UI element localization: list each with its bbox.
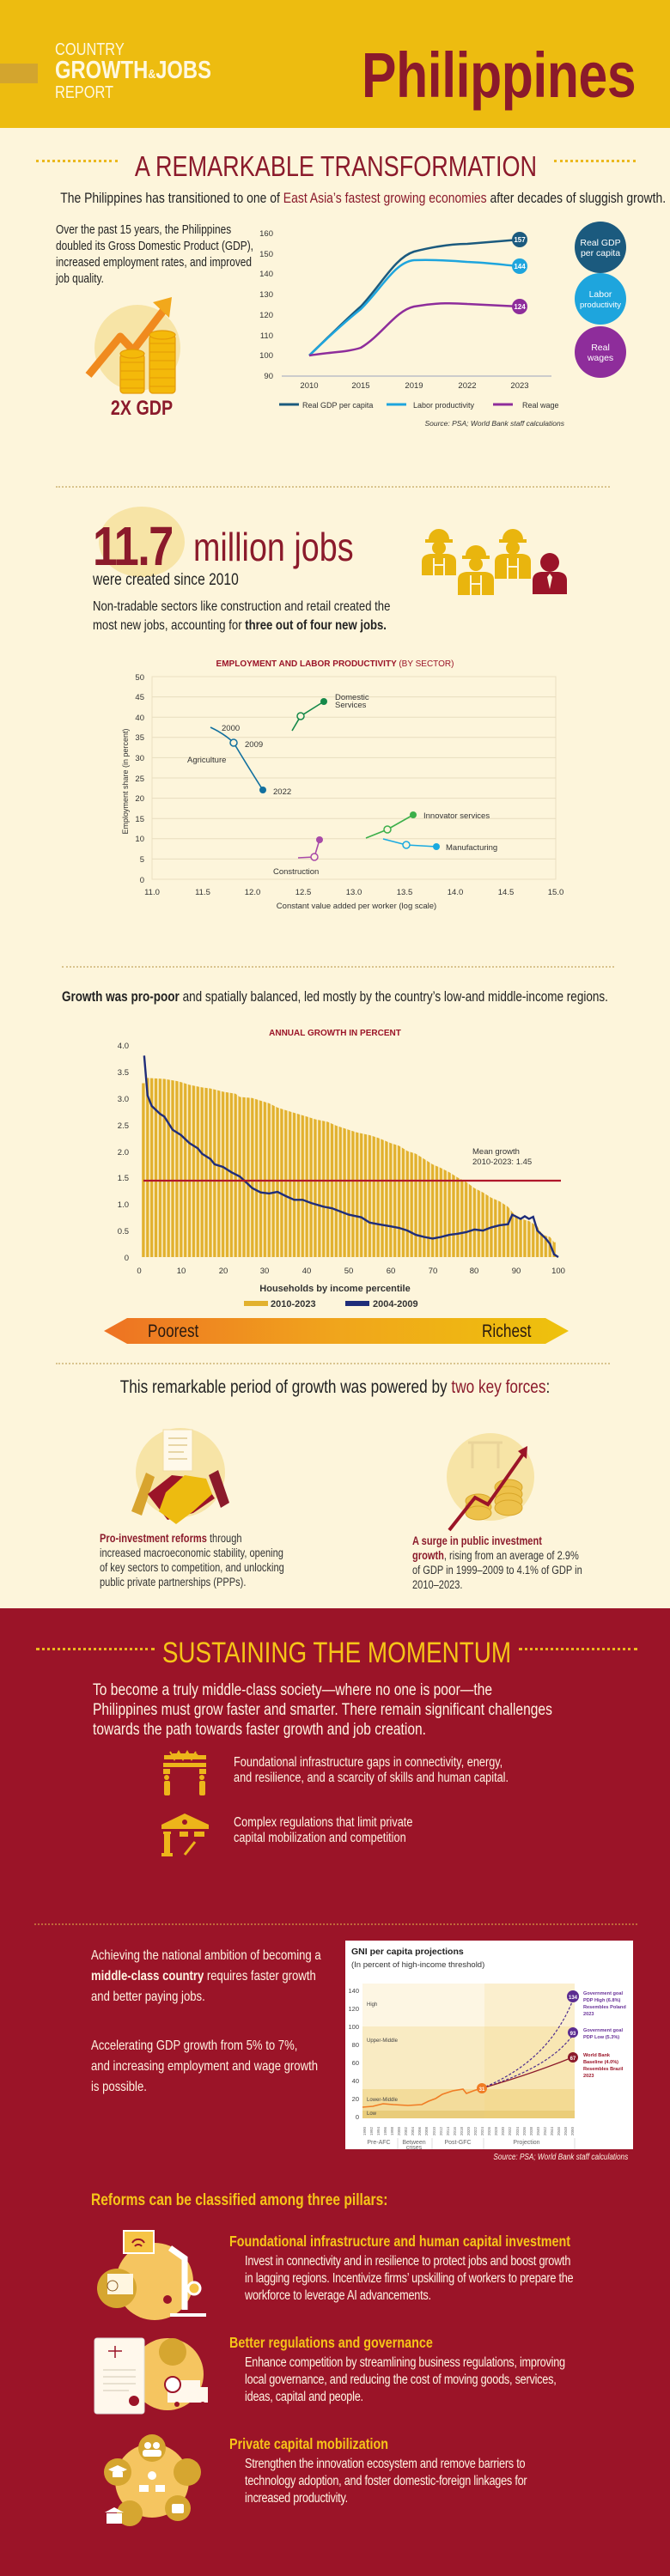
text: public investment surge: growth, rising from an average of 2.9% [412, 1549, 579, 1562]
line chart: GDP, productivity, wages: 140 [259, 270, 273, 279]
icon: workers [422, 529, 567, 595]
legend circles: productivity [580, 301, 621, 310]
line chart: GDP, productivity, wages: 120 [259, 311, 273, 320]
bar chart: annual growth by percentile: 80 [470, 1267, 478, 1276]
bar chart: annual growth by percentile: 40 [302, 1267, 311, 1276]
text: pro-poor growth: Growth was pro-poor and spatially balanced, led mostly by the country’s low-and middle-income regions. [62, 989, 608, 1005]
chart: GNI per capita projections: Government goal [583, 2028, 623, 2033]
bar chart: annual growth by percentile: 0.5 [118, 1227, 129, 1236]
intro paragraph: towards the path towards faster growth and job creation. [93, 1721, 426, 1739]
pillar 1: workforce to leverage AI advancements. [245, 2288, 431, 2303]
chart: GNI per capita projections: 2040 [536, 2126, 540, 2136]
text: pro-investment reforms: public private partnerships (PPPs). [100, 1576, 246, 1589]
chart: GNI per capita projections: PDP Low (5.3%) [583, 2035, 619, 2040]
chart: GNI per capita projections: crises [406, 2145, 423, 2151]
pillar 3 [229, 2435, 527, 2506]
scatter chart: employment and labor productivity: Domestic [335, 693, 369, 702]
scatter chart: employment and labor productivity: 20 [135, 794, 144, 804]
chart: GNI per capita projections: 2020 [466, 2126, 471, 2136]
bar chart: annual growth by percentile: 3.0 [118, 1095, 129, 1104]
line chart: GDP, productivity, wages: 110 [260, 331, 273, 341]
scatter chart: employment and labor productivity: Employment share (in percent) [121, 728, 130, 835]
legend circles: Real [591, 343, 610, 353]
chart: GNI per capita projections: 2004 [411, 2126, 415, 2136]
chart: GNI per capita projections: Low [367, 2111, 377, 2117]
chart: GNI per capita projections: Resembles Poland [583, 2005, 626, 2010]
bar chart: annual growth by percentile: Households by income percentile [259, 1284, 411, 1294]
line chart: GDP, productivity, wages: 2010 [300, 381, 319, 391]
chart: GNI per capita projections: 2028 [494, 2126, 498, 2136]
chart: GNI per capita projections [345, 1941, 633, 2151]
pillar 1 [229, 2233, 573, 2303]
text: pro-investment reforms: Pro-investment reforms through [100, 1532, 242, 1545]
chart: GNI per capita projections: Pre-AFC [367, 2140, 391, 2146]
subtitle: The Philippines has transitioned to one of East Asia’s fastest growing economies after decades of sluggish growth. [60, 190, 666, 206]
line chart: GDP, productivity, wages: 2023 [510, 381, 529, 391]
chart: GNI per capita projections: 2038 [529, 2126, 533, 2136]
report label: REPORT [55, 83, 113, 102]
intro paragraph: Philippines must grow faster and smarter. There remain significant challenges [93, 1701, 552, 1719]
pillar 3: increased productivity. [245, 2491, 348, 2506]
text: GDP doubled: doubled its Gross Domestic Product (GDP), [56, 240, 253, 253]
chart: GNI per capita projections: Baseline (4.0%) [583, 2060, 618, 2065]
pillar 2: Better regulations and governance [229, 2334, 433, 2351]
scatter chart: employment and labor productivity: 50 [135, 673, 144, 683]
text: accelerating growth [91, 2038, 318, 2094]
report label: COUNTRY [55, 40, 125, 59]
bar chart: annual growth by percentile: 100 [551, 1267, 565, 1276]
line chart: GDP, productivity, wages: 124 [514, 303, 526, 311]
section title: sustaining [36, 1637, 637, 1669]
bar chart: annual growth by percentile: 2.5 [118, 1121, 129, 1131]
chart: GNI per capita projections: 140 [348, 1987, 359, 1995]
line chart: GDP, productivity, wages [259, 229, 565, 428]
chart: GNI per capita projections: 2048 [563, 2126, 568, 2136]
text: middle-class ambition [91, 1948, 321, 2004]
bar chart: annual growth by percentile: Mean growth [472, 1147, 520, 1157]
chart: GNI per capita projections: 60 [352, 2059, 359, 2067]
chart: GNI per capita projections: 1998 [390, 2126, 394, 2136]
chart: GNI per capita projections: 1994 [376, 2126, 381, 2136]
scatter chart: employment and labor productivity: Agriculture [187, 756, 226, 765]
text: GDP doubled: Over the past 15 years, the Philippines [56, 223, 231, 237]
chart: GNI per capita projections: 2044 [550, 2126, 554, 2136]
text: accelerating growth: Accelerating GDP growth from 5% to 7%, [91, 2038, 297, 2053]
pillar 3: Private capital mobilization [229, 2435, 388, 2452]
bar chart: annual growth by percentile: 30 [260, 1267, 269, 1276]
chart: GNI per capita projections: 2046 [557, 2126, 561, 2136]
report label: GROWTH&JOBS [55, 57, 211, 84]
big number: jobs: were created since 2010 [93, 571, 239, 589]
chart: GNI per capita projections: High [367, 2002, 377, 2008]
line chart: GDP, productivity, wages: 130 [259, 290, 273, 300]
2X GDP label: 2X GDP [111, 397, 173, 420]
scatter chart: employment and labor productivity [121, 659, 563, 911]
chart: GNI per capita projections: 0 [356, 2113, 359, 2121]
section title: transformation [36, 150, 636, 182]
chart: GNI per capita projections: 2002 [404, 2126, 408, 2136]
chart: GNI per capita projections: 2018 [460, 2126, 464, 2136]
chart: GNI per capita projections: 2010 [432, 2126, 436, 2136]
text: non-tradable sectors [93, 599, 390, 633]
text: accelerating growth: and increasing employment and wage growth [91, 2059, 318, 2074]
chart: GNI per capita projections: Between [402, 2140, 426, 2146]
pillar 1: Invest in connectivity and in resilience to protect jobs and boost growth [245, 2254, 570, 2269]
icon: bank with broken chain [161, 1814, 209, 1856]
legend circles: wages [587, 353, 613, 363]
challenge: regulations: Complex regulations that limit private [234, 1815, 412, 1830]
chart: GNI per capita projections: 2023 [583, 2074, 594, 2079]
chart: GNI per capita projections: 2016 [453, 2126, 457, 2136]
legend circles: per capita [581, 248, 620, 258]
pillar 2: Enhance competition by streamlining business regulations, improving [245, 2355, 565, 2370]
text: pro-investment reforms: of key sectors to competition, and unlocking [100, 1561, 284, 1574]
scatter chart: employment and labor productivity: Services [335, 701, 367, 710]
text: GDP doubled: increased employment rates, and improved [56, 256, 252, 270]
separator [56, 486, 610, 488]
bar chart: annual growth by percentile: 4.0 [118, 1042, 129, 1051]
pillar 1: Foundational infrastructure and human capital investment [229, 2233, 570, 2250]
source note: Source: PSA; World Bank staff calculations [493, 2153, 628, 2162]
legend circles: Labor [589, 289, 612, 300]
chart: GNI per capita projections: 2000 [397, 2126, 401, 2136]
chart: GNI per capita projections: 2022 [473, 2126, 478, 2136]
scatter chart: employment and labor productivity: 11.0 [144, 888, 160, 897]
chart: GNI per capita projections: 1990 [362, 2126, 367, 2136]
challenge: infrastructure [234, 1755, 509, 1785]
scatter chart: employment and labor productivity: 0 [140, 876, 144, 885]
icon: public investment coins [447, 1433, 534, 1530]
chart: GNI per capita projections: 31 [479, 2087, 485, 2093]
text: GDP doubled [55, 223, 253, 286]
scatter chart: employment and labor productivity: 14.0 [448, 888, 463, 897]
text: GDP doubled: job quality. [56, 272, 104, 286]
bar chart: annual growth by percentile: 0 [137, 1267, 142, 1276]
chart: GNI per capita projections: Projection [513, 2140, 540, 2146]
chart: GNI per capita projections: (In percent of high-income threshold) [351, 1960, 484, 1970]
line chart: GDP, productivity, wages: 100 [259, 351, 273, 361]
scatter chart: employment and labor productivity: 2000 [222, 724, 240, 733]
scatter chart: employment and labor productivity: 2009 [245, 740, 263, 750]
bar chart: annual growth by percentile: 0 [125, 1254, 129, 1263]
chart: GNI per capita projections: 20 [352, 2095, 359, 2103]
line chart: GDP, productivity, wages: Labor productivity [413, 401, 475, 410]
scatter chart: employment and labor productivity: Constant value added per worker (log scale) [277, 902, 436, 911]
bar chart: annual growth by percentile: 3.5 [118, 1068, 129, 1078]
chart: GNI per capita projections: 67 [570, 2057, 576, 2062]
panel: sustaining the momentum (red) [0, 1608, 670, 2576]
line chart: GDP, productivity, wages: 160 [259, 229, 273, 239]
line chart: GDP, productivity, wages: 144 [514, 263, 526, 270]
poorest-richest arrow [104, 1318, 569, 1344]
bar chart: annual growth by percentile: 1.0 [118, 1200, 129, 1210]
chart: GNI per capita projections: 100 [348, 2023, 359, 2031]
icon: regulations and governance [94, 2338, 208, 2414]
header tab [0, 64, 38, 83]
bar chart: annual growth by percentile: 2004-2009 [373, 1299, 418, 1309]
scatter chart: employment and labor productivity: 13.5 [397, 888, 412, 897]
challenge: infrastructure: and resilience, and a scarcity of skills and human capital. [234, 1771, 509, 1785]
separator [34, 1923, 637, 1925]
section title: transformation: A REMARKABLE TRANSFORMATION [135, 150, 537, 182]
big number: jobs: million jobs [193, 525, 354, 569]
line chart: GDP, productivity, wages: 150 [259, 250, 273, 259]
text: public investment surge: of GDP in 1999–2009 to 4.1% of GDP in [412, 1564, 582, 1577]
chart: GNI per capita projections: 2034 [515, 2126, 520, 2136]
big number: jobs: 11.7 [93, 515, 173, 577]
intro paragraph: To become a truly middle-class society—where no one is poor—the [93, 1681, 492, 1699]
icon: infrastructure and human capital [97, 2231, 206, 2320]
bar chart: annual growth by percentile: 2010-2023 [271, 1299, 316, 1309]
line chart: GDP, productivity, wages: 2015 [351, 381, 370, 391]
intro paragraph [93, 1681, 552, 1739]
icon: private capital network [104, 2434, 201, 2526]
scatter chart: employment and labor productivity: 40 [135, 714, 144, 723]
chart: GNI per capita projections: 2023 [583, 2012, 594, 2017]
scatter chart: employment and labor productivity: 45 [135, 693, 144, 702]
scatter chart: employment and labor productivity: 25 [135, 775, 144, 784]
line chart: GDP, productivity, wages: 2019 [405, 381, 423, 391]
scatter chart: employment and labor productivity: 15 [135, 815, 144, 824]
chart: GNI per capita projections: 2050 [570, 2126, 575, 2136]
chart: GNI per capita projections: 2030 [501, 2126, 505, 2136]
scatter chart: employment and labor productivity: 11.5 [195, 888, 210, 897]
separator [56, 1363, 610, 1364]
bar chart: annual growth by percentile: 2010-2023: 1.45 [472, 1157, 532, 1167]
chart: GNI per capita projections: 2012 [439, 2126, 443, 2136]
pillar 3: technology adoption, and foster domestic-foreign linkages for [245, 2474, 527, 2488]
pillar 2 [229, 2334, 565, 2404]
scatter chart: employment and labor productivity: Innovator services [423, 811, 490, 821]
chart: GNI per capita projections: World Bank [583, 2053, 611, 2058]
chart: GNI per capita projections: Upper-Middle [367, 2038, 399, 2044]
chart: GNI per capita projections: 80 [352, 2041, 359, 2049]
chart: GNI per capita projections: GNI per capita projections [351, 1947, 464, 1957]
text: non-tradable sectors: most new jobs, accounting for three out of four new jobs. [93, 618, 387, 633]
chart: GNI per capita projections: 40 [352, 2077, 359, 2085]
scatter chart: employment and labor productivity: 12.5 [295, 888, 311, 897]
bar chart: annual growth by percentile: 2.0 [118, 1148, 129, 1157]
chart: GNI per capita projections: 2024 [480, 2126, 484, 2136]
chart: GNI per capita projections: 2026 [487, 2126, 491, 2136]
bar chart: annual growth by percentile: 50 [344, 1267, 353, 1276]
challenge: infrastructure: Foundational infrastructure gaps in connectivity, energy, [234, 1755, 502, 1770]
chart: GNI per capita projections: Government goal [583, 1991, 623, 1996]
scatter chart: employment and labor productivity: 15.0 [548, 888, 563, 897]
scatter chart: employment and labor productivity: Manufacturing [446, 843, 497, 853]
chart: GNI per capita projections: 2014 [446, 2126, 450, 2136]
text: middle-class ambition: middle-class country requires faster growth [91, 1969, 316, 1984]
line chart: GDP, productivity, wages: Real GDP per capita [302, 401, 373, 410]
scatter chart: employment and labor productivity: 30 [135, 754, 144, 763]
scatter chart: employment and labor productivity: 14.5 [498, 888, 514, 897]
text: non-tradable sectors: Non-tradable sectors like construction and retail created the [93, 599, 390, 614]
text: public investment surge: A surge in public investment [412, 1534, 542, 1547]
chart: GNI per capita projections: 134 [569, 1996, 578, 2001]
text: pro-investment reforms: increased macroeconomic stability, opening [100, 1546, 283, 1559]
report label [55, 40, 211, 102]
challenge: regulations [234, 1815, 412, 1845]
scatter chart: employment and labor productivity: 13.0 [346, 888, 362, 897]
bar chart: annual growth by percentile: 90 [512, 1267, 521, 1276]
heading: two key forces: This remarkable period of growth was powered by two key forces: [120, 1377, 550, 1397]
chart: GNI per capita projections: 2006 [417, 2126, 422, 2136]
scatter chart: employment and labor productivity: 35 [135, 733, 144, 743]
chart: GNI per capita projections: 2042 [543, 2126, 547, 2136]
bar chart: annual growth by percentile: 10 [177, 1267, 186, 1276]
chart: GNI per capita projections: Resembles Brazil [583, 2067, 624, 2072]
line chart: GDP, productivity, wages: Real wage [522, 401, 559, 410]
line chart: GDP, productivity, wages: Source: PSA; World Bank staff calculations [424, 419, 565, 428]
chart: GNI per capita projections: Lower-Middle [367, 2098, 399, 2103]
icon: bridge with people [163, 1752, 206, 1795]
icon: coins with arrow [88, 297, 180, 393]
scatter chart: employment and labor productivity: 10 [135, 835, 144, 844]
line chart: GDP, productivity, wages: 90 [264, 372, 273, 381]
scatter chart: employment and labor productivity: Construction [273, 867, 319, 877]
bar chart: annual growth by percentile: 70 [429, 1267, 437, 1276]
chart: GNI per capita projections: 1996 [383, 2126, 387, 2136]
line chart: GDP, productivity, wages: 157 [514, 236, 526, 244]
pillar 1: in lagging regions. Incentivize firms’ upskilling of workers to prepare the [245, 2271, 573, 2286]
bar chart: annual growth by percentile [118, 1029, 565, 1309]
section title: sustaining: SUSTAINING THE MOMENTUM [162, 1637, 511, 1669]
poorest-richest arrow: Poorest [148, 1321, 198, 1341]
text: pro-investment reforms [100, 1532, 284, 1589]
chart: GNI per capita projections: 120 [348, 2005, 359, 2013]
chart: GNI per capita projections: 2008 [424, 2126, 429, 2136]
text: public investment surge [412, 1534, 582, 1591]
pillar 2: ideas, capital and people. [245, 2390, 363, 2404]
chart: GNI per capita projections: 1992 [369, 2126, 374, 2136]
pillar 2: local governance, and reducing the cost of moving goods, services, [245, 2372, 557, 2387]
bar chart: annual growth by percentile: 60 [387, 1267, 395, 1276]
chart: GNI per capita projections: 93 [570, 2032, 576, 2037]
text: accelerating growth: is possible. [91, 2080, 147, 2094]
poorest-richest arrow: Richest [482, 1321, 531, 1341]
header band [0, 0, 670, 128]
bar chart: annual growth by percentile: ANNUAL GROWTH IN PERCENT [269, 1029, 401, 1038]
heading: three pillars: Reforms can be classified among three pillars: [91, 2191, 387, 2209]
country title: Philippines [362, 39, 636, 111]
bar chart: annual growth by percentile: 1.5 [118, 1174, 129, 1183]
bar chart: annual growth by percentile: 20 [219, 1267, 228, 1276]
scatter chart: employment and labor productivity: 12.0 [245, 888, 260, 897]
chart: GNI per capita projections: 2036 [522, 2126, 527, 2136]
challenge: regulations: capital mobilization and competition [234, 1831, 406, 1845]
pillar 3: Strengthen the innovation ecosystem and remove barriers to [245, 2457, 525, 2471]
text: public investment surge: 2010–2023. [412, 1578, 462, 1591]
scatter chart: employment and labor productivity: EMPLOYMENT AND LABOR PRODUCTIVITY (BY SECTOR) [216, 659, 454, 669]
chart: GNI per capita projections: 2032 [508, 2126, 512, 2136]
scatter chart: employment and labor productivity: 5 [140, 855, 144, 865]
separator [62, 966, 614, 968]
chart: GNI per capita projections: Post-GFC [444, 2140, 472, 2146]
text: middle-class ambition: Achieving the national ambition of becoming a [91, 1948, 321, 1963]
icon: handshake [131, 1428, 229, 1524]
chart: GNI per capita projections: PDP High (6.8%) [583, 1998, 621, 2003]
scatter chart: employment and labor productivity: 2022 [273, 787, 291, 797]
big number: jobs [93, 507, 354, 589]
line chart: GDP, productivity, wages: 2022 [458, 381, 477, 391]
text: middle-class ambition: and better paying jobs. [91, 1990, 205, 2004]
legend circles [575, 222, 626, 378]
legend circles: Real GDP [580, 238, 621, 248]
